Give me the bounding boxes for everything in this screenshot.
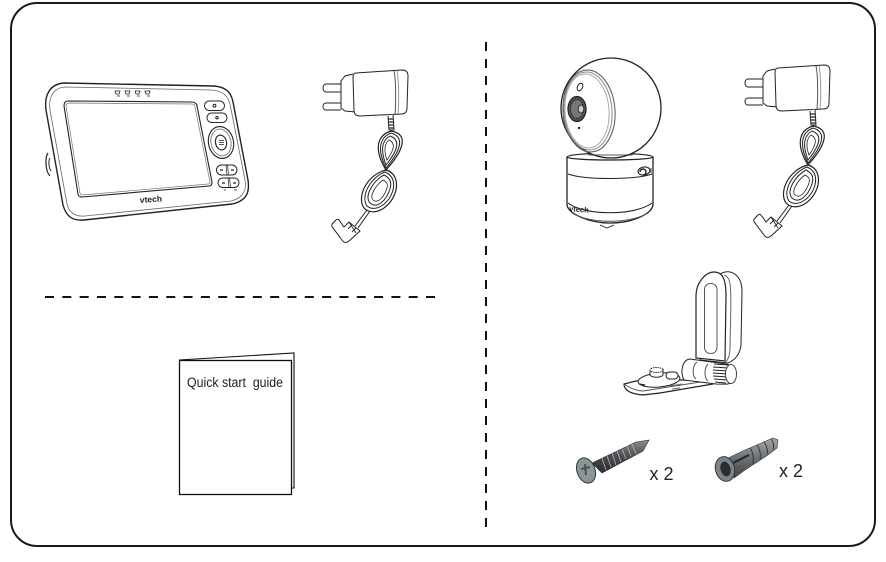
monitor indicator lights bbox=[115, 91, 150, 96]
adapter cord strain relief bbox=[388, 114, 394, 130]
icon: monitor power adapter bbox=[323, 70, 408, 242]
bracket rear plate bbox=[700, 272, 742, 363]
camera lens bbox=[568, 96, 586, 122]
vertical dashed divider bbox=[485, 42, 487, 527]
icon: wall anchor bbox=[713, 438, 778, 484]
bracket hinge cylinder bbox=[682, 359, 736, 384]
camera base bbox=[567, 157, 653, 223]
camera slide switch bbox=[637, 166, 651, 176]
monitor side knob bbox=[46, 153, 50, 176]
bracket thumb screw bbox=[650, 369, 663, 377]
cord to plug bbox=[355, 210, 370, 228]
anchor body bbox=[728, 438, 778, 478]
monitor volume buttons bbox=[216, 165, 237, 175]
label: screw quantity: x 2 bbox=[650, 464, 674, 484]
label: anchor quantity: x 2 bbox=[779, 461, 803, 481]
monitor zoom buttons bbox=[218, 178, 239, 188]
horizontal dashed divider bbox=[45, 296, 435, 298]
bracket hinge teeth bbox=[713, 364, 728, 383]
cord upper loop bbox=[378, 131, 402, 170]
bracket clip bbox=[666, 372, 678, 379]
adapter prongs bbox=[323, 84, 341, 92]
monitor screen bbox=[64, 101, 212, 197]
booklet back page bbox=[179, 353, 294, 488]
screw shaft bbox=[592, 440, 649, 473]
adapter body bbox=[353, 70, 408, 116]
camera sensor bbox=[576, 82, 584, 92]
bracket swivel disc bbox=[637, 371, 681, 389]
monitor power button bbox=[204, 101, 224, 110]
anchor collar bbox=[713, 454, 737, 484]
booklet front page bbox=[180, 360, 292, 494]
icon: parent monitor bbox=[46, 83, 248, 220]
bracket front plate bbox=[696, 272, 726, 361]
camera base seam bbox=[568, 174, 652, 178]
DC plug bbox=[332, 219, 360, 242]
cord lower loop bbox=[361, 170, 397, 212]
camera face rings bbox=[560, 68, 618, 154]
monitor home button bbox=[207, 113, 227, 122]
camera mic dot bbox=[578, 127, 580, 129]
monitor d-pad bbox=[205, 124, 237, 161]
icon: wall mount bracket bbox=[624, 272, 742, 395]
icon: screw bbox=[573, 440, 649, 486]
icon: booklet bbox=[179, 353, 294, 494]
monitor body outline bbox=[46, 83, 248, 220]
icon: baby camera bbox=[560, 58, 661, 228]
camera base foot bbox=[600, 225, 614, 228]
icon: camera power adapter bbox=[745, 65, 830, 237]
monitor brand label: vtech bbox=[139, 193, 162, 205]
bracket slot bbox=[704, 284, 717, 354]
camera brand label: vtech bbox=[569, 204, 590, 215]
adapter collar bbox=[341, 74, 356, 112]
bracket base plate bbox=[624, 380, 713, 395]
screw head bbox=[573, 455, 599, 486]
booklet title: Quick start guide bbox=[187, 375, 283, 390]
camera sphere bbox=[561, 58, 661, 158]
